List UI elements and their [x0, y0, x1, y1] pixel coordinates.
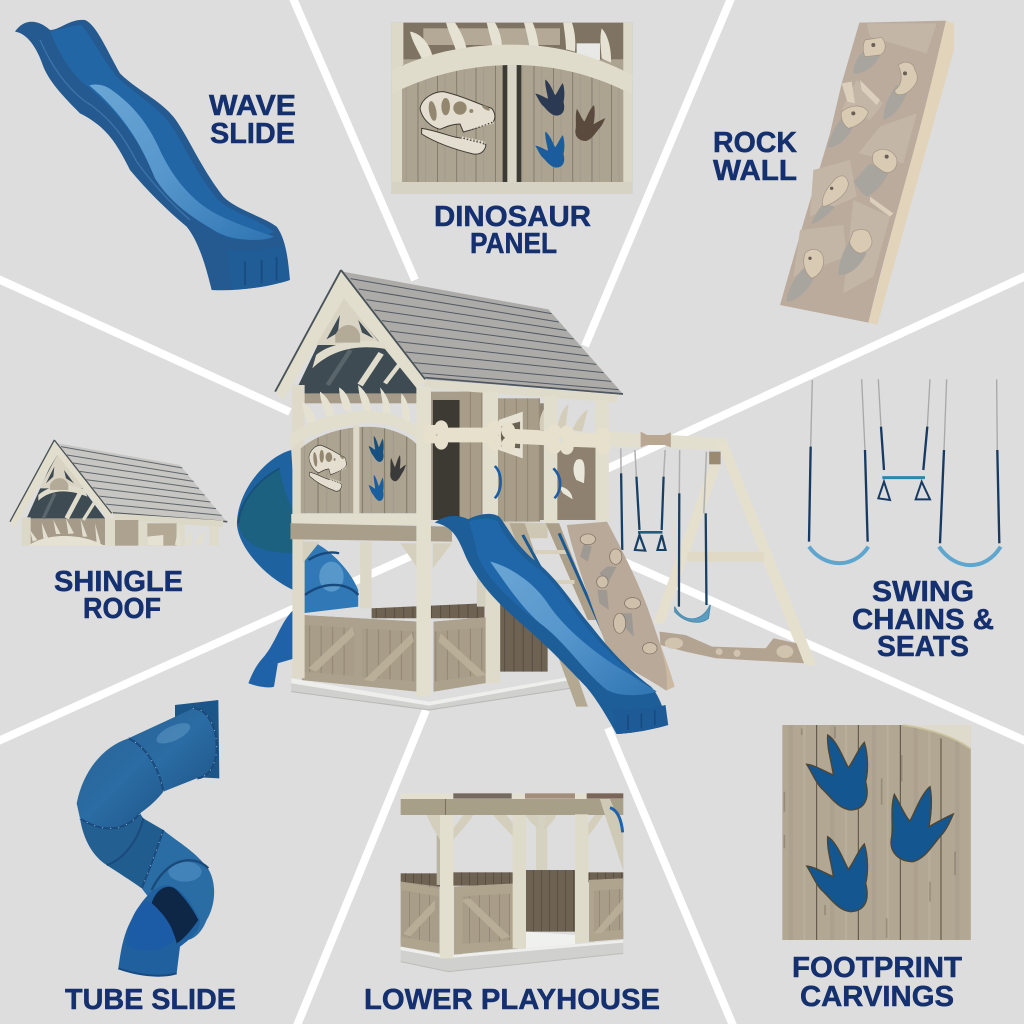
feature: swing chains and seats — [809, 379, 1001, 663]
label: swing chains and seats — [852, 576, 994, 663]
label: wave slide: WAVE — [209, 90, 296, 122]
swing set — [609, 432, 816, 665]
wave slide illustration — [15, 20, 290, 290]
label: footprint carvings: CARVINGS — [800, 981, 954, 1013]
label: dinosaur panel — [434, 201, 591, 260]
trapeze bar with rings — [878, 379, 930, 500]
label: shingle roof: ROOF — [83, 593, 161, 625]
label: dinosaur panel: DINOSAUR — [434, 201, 591, 233]
label: tube slide: TUBE SLIDE — [65, 984, 236, 1016]
ladder and rock wall on tower — [509, 522, 675, 707]
rock wall illustration — [780, 21, 954, 325]
tube slide illustration — [77, 700, 219, 976]
wave slide on tower — [435, 514, 668, 734]
label: shingle roof — [54, 566, 183, 625]
shingle roof illustration — [10, 440, 227, 546]
feature: wave slide — [15, 20, 296, 290]
tube slide on tower — [237, 450, 358, 687]
lower playhouse illustration — [401, 793, 623, 972]
label: rock wall — [713, 127, 797, 187]
swing seat left — [809, 379, 868, 563]
label: lower playhouse: LOWER PLAYHOUSE — [364, 984, 660, 1016]
climbing handles — [495, 466, 560, 498]
dinosaur panel illustration — [392, 23, 632, 193]
feature: tube slide — [65, 700, 236, 1016]
label: swing chains and seats: CHAINS & — [852, 604, 994, 636]
swing hardware illustration — [809, 379, 1001, 565]
central playset — [237, 270, 816, 734]
label: wave slide: SLIDE — [210, 118, 295, 150]
label: rock wall: WALL — [713, 155, 797, 187]
label: swing chains and seats: SWING — [872, 576, 974, 608]
label: dinosaur panel: PANEL — [470, 228, 557, 260]
feature: footprint carvings — [782, 725, 971, 1013]
tower roof — [275, 270, 623, 403]
bone rail — [424, 420, 610, 455]
feature: lower playhouse — [364, 793, 660, 1016]
tower posts, ribs and arch panel — [290, 385, 609, 697]
label: swing chains and seats: SEATS — [877, 631, 969, 663]
swing seat right — [939, 379, 1001, 565]
feature: shingle roof — [10, 440, 227, 625]
label: rock wall: ROCK — [713, 127, 797, 159]
label: footprint carvings: FOOTPRINT — [792, 952, 962, 984]
feature: dinosaur panel — [392, 23, 632, 260]
footprint carvings illustration — [782, 725, 971, 940]
label: wave slide — [209, 90, 296, 150]
feature: rock wall — [713, 21, 954, 325]
lower playhouse of tower — [291, 542, 571, 710]
label: shingle roof: SHINGLE — [54, 566, 183, 598]
label: footprint carvings — [792, 952, 962, 1013]
tower upper walls — [431, 392, 597, 522]
